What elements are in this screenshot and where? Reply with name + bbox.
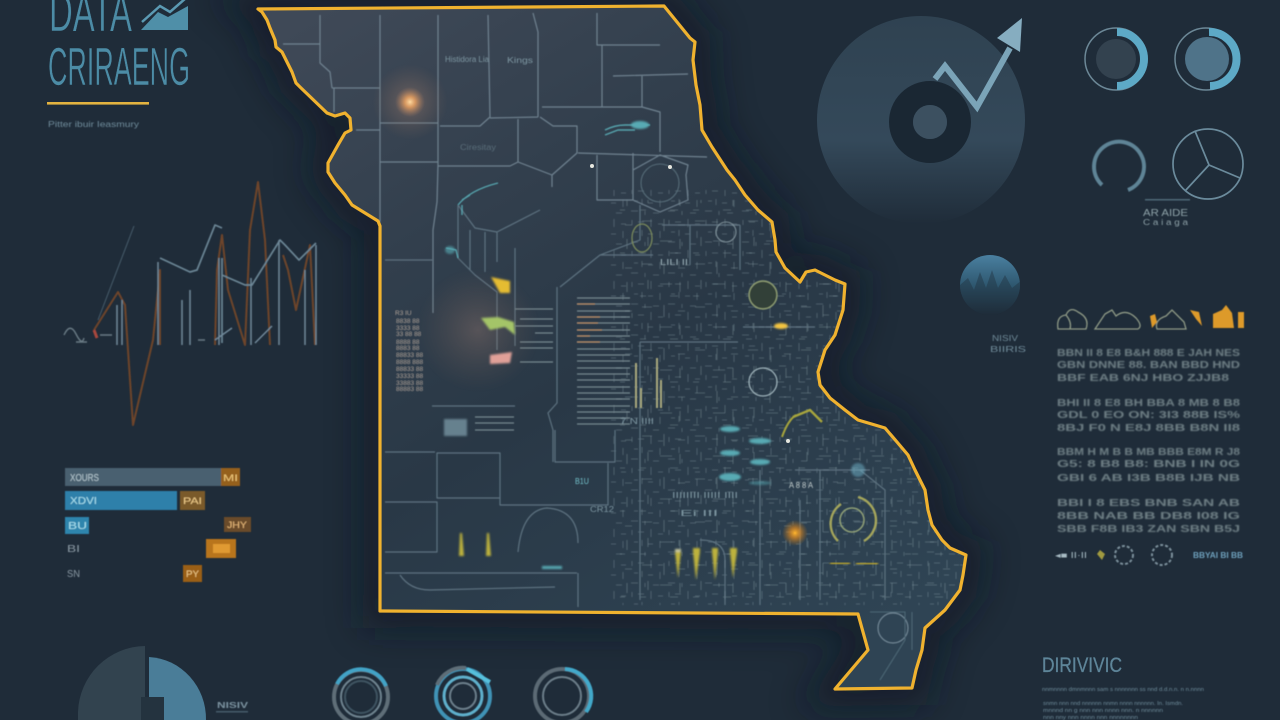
ring gauge 1 — [334, 669, 388, 720]
map annotations: Ciresitay — [460, 143, 496, 152]
pie caption: C a i a g a — [1143, 218, 1189, 227]
series: faint orange — [94, 182, 315, 425]
bar 3: BU — [68, 521, 87, 532]
ring gauge 3 — [535, 669, 591, 720]
map annotations — [445, 55, 814, 518]
table block 1: BBN II 8 E8 B&H 888 E JAH NES — [1057, 347, 1240, 359]
chart legend marks — [64, 328, 205, 342]
bar 1: MI — [223, 473, 238, 483]
dark donut — [901, 93, 959, 151]
table block 4: SBB F8B IB3 ZAN SBN B5J — [1057, 523, 1240, 535]
series: vertical stems — [117, 240, 316, 345]
map annotations: B1U — [575, 477, 589, 486]
table block 2 — [1057, 397, 1241, 434]
map annotations: CR12 — [590, 505, 615, 514]
bar 3 — [65, 517, 251, 534]
donut chart 1 — [1085, 28, 1147, 90]
gauge rings — [632, 164, 912, 680]
table block 2: BHI II 8 E8 BH BBA 8 MB 8 B8 — [1057, 397, 1240, 409]
pie outline — [1173, 129, 1243, 199]
weather icons row — [1058, 305, 1244, 329]
bar 2: XDVI — [70, 496, 97, 507]
bottom-right text lines: nnmnnnn dmnmnnn sam s nnnnnnn ss nnd d.d.n.n. n n.nnnn — [1042, 687, 1204, 693]
line chart — [64, 182, 316, 425]
series: blue gray — [98, 226, 134, 320]
donut chart 2 — [1175, 28, 1237, 90]
table block 2: 8BJ F0 N E8J 8BB B8N II8 — [1057, 422, 1240, 434]
table footer icons: BBYAI BI BB — [1193, 551, 1243, 560]
map annotations: LILI II — [660, 258, 688, 267]
list of values: 8838 88 — [396, 318, 420, 325]
bottom-right text lines: mnnnd nn g nnn nnn nnnn nnn. n nnnnnn — [1043, 708, 1163, 714]
map annotations: Histidora Lia — [445, 55, 490, 64]
table footer icons — [1055, 545, 1243, 565]
table block 4 — [1057, 497, 1241, 535]
dome caption — [990, 334, 1026, 354]
state border — [258, 6, 966, 689]
title underline — [47, 102, 149, 105]
map of Missouri — [258, 6, 970, 689]
vertical bars in mid map — [636, 358, 661, 408]
bar 2 — [65, 491, 205, 510]
map annotations: Ei III — [680, 509, 718, 518]
bottom pie chart — [78, 646, 206, 720]
data text table — [1057, 347, 1241, 535]
map annotations: 7 N IIII — [620, 417, 654, 426]
bar chart — [65, 468, 251, 582]
colored data blobs — [416, 268, 540, 392]
table block 3: BBM H M B B MB BBB E8M R J8 — [1057, 446, 1240, 458]
orange glow — [372, 64, 448, 140]
list of values: 3333 88 — [396, 325, 420, 332]
bar 2: PAI — [183, 496, 202, 506]
dome caption: NISIV — [992, 334, 1019, 343]
list of values: 33 88 88 — [396, 331, 422, 338]
table block 2: GDL 0 EO ON: 3I3 88B IS% — [1057, 409, 1241, 421]
list of values: 88883 88 — [396, 386, 423, 393]
table block 3 — [1057, 446, 1241, 484]
icon: title trend chart — [141, 0, 188, 30]
map annotations: Kings — [507, 56, 533, 65]
infographic canvas: CRIRAENG — [48, 37, 190, 97]
table block 1 — [1057, 347, 1241, 384]
growth emblem — [817, 16, 1025, 224]
list of values: 88833 88 — [396, 352, 423, 359]
yellow spike markers — [459, 533, 737, 580]
title block — [47, 0, 190, 129]
list of values: 8888 88 — [396, 339, 420, 346]
teal blobs — [444, 121, 771, 569]
highlights — [590, 164, 878, 564]
list of values: 33333 88 — [396, 373, 423, 380]
table footer icons: ◂■ II·II — [1055, 551, 1087, 560]
bottom-right heading: DIRIVIVIC — [1042, 654, 1122, 677]
map annotations: A 8 8 A — [789, 481, 814, 490]
bar 3: JHY — [227, 520, 247, 530]
teal sketch lines — [446, 125, 650, 258]
table block 4: 8BB NAB BB DB8 I08 IG — [1057, 510, 1240, 522]
table block 1: BBF EAB 6NJ HBO ZJJB8 — [1057, 372, 1229, 384]
bar 1 — [65, 468, 240, 486]
table block 4: BBI I 8 EBS BNB SAN AB — [1057, 497, 1241, 509]
list of values: 33883 88 — [396, 380, 423, 387]
bar 4: BI — [67, 544, 80, 555]
ring gauge 2 — [436, 668, 490, 720]
dense data texture — [610, 190, 970, 605]
table block 1: GBN DNNE 88. BAN BBD HND — [1057, 359, 1241, 371]
bar 5 — [67, 565, 202, 582]
lower county lines — [385, 205, 885, 607]
bottom-right text lines — [1042, 687, 1204, 720]
bottom-right text lines: snmn nnn nnd nnnnnn nnmn nnnn nnnnnn. In. Ismdn. — [1043, 701, 1184, 707]
pie label: NISIV — [217, 701, 249, 710]
pie label — [216, 701, 249, 712]
orange tinted stripes — [577, 304, 602, 342]
pie caption — [1143, 199, 1190, 227]
map fill — [258, 6, 966, 689]
table block 3: G5: 8 B8 B8: BNB I IN 0G — [1057, 458, 1240, 470]
list of values: 8888 888 — [396, 359, 423, 366]
table block 3: GBI 6 AB I3B B8B IJB NB — [1057, 472, 1241, 484]
bar 1: XOURS — [70, 473, 99, 484]
county lines — [283, 13, 707, 313]
large disc — [817, 16, 1025, 224]
growth arrow — [935, 18, 1022, 107]
pie caption: AR AIDE — [1143, 208, 1188, 219]
subtitle: Pitter ibuir Ieasmury — [48, 119, 140, 129]
dome caption: BIIRIS — [990, 345, 1026, 354]
map annotations: IIIIIIII IIIII IIII — [672, 491, 738, 500]
list of values — [395, 310, 423, 393]
horizontal stripes — [475, 298, 630, 430]
list of values: 88833 88 — [396, 366, 423, 373]
bar 5: PY — [186, 569, 199, 579]
list of values: 8883 88 — [396, 345, 420, 352]
bar 5: SN — [67, 569, 80, 580]
arc gauge — [1094, 142, 1144, 190]
list of values: R3 IU — [395, 310, 412, 317]
map shadow — [258, 6, 966, 689]
bar 4 — [67, 539, 236, 558]
dome chart — [960, 255, 1020, 308]
